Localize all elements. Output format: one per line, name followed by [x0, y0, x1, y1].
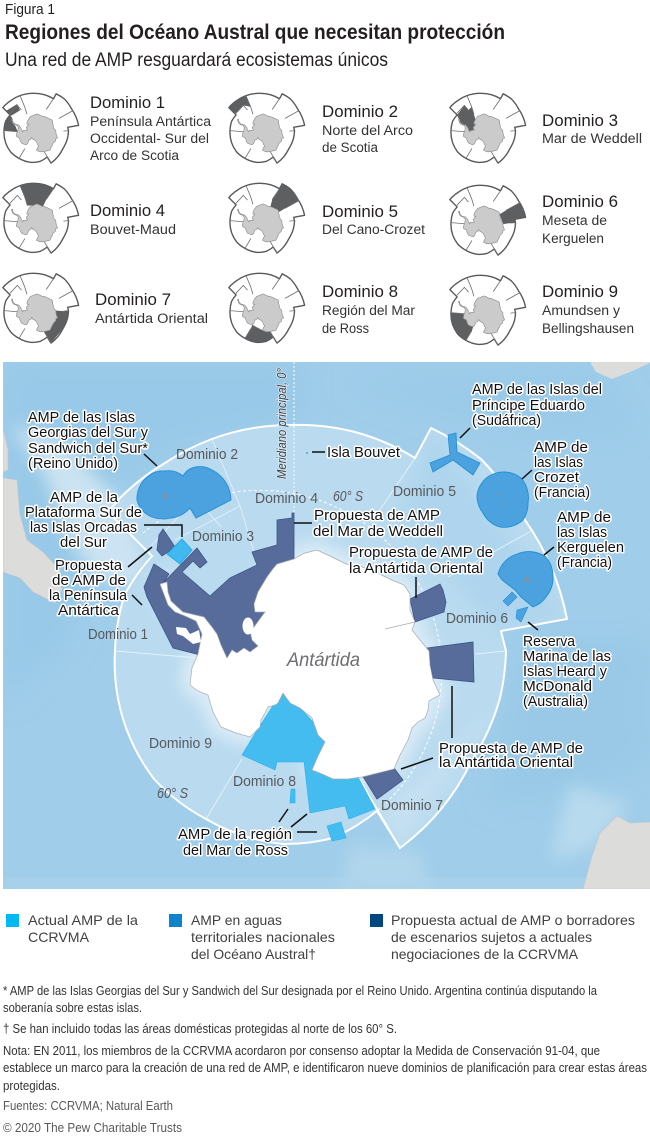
subtitle: Una red de AMP resguardará ecosistemas únicos [5, 50, 388, 71]
text: domain 6: Dominio 6 [542, 192, 618, 211]
legend: current CCAMLR MPA: CCRVMA [28, 929, 90, 945]
domain labels: Dominio 7 [381, 798, 443, 814]
text: domain 1 [90, 93, 212, 163]
legend: national waters MPA: territoriales nacionales [191, 929, 335, 945]
label: South Georgia MPA: Georgias del Sur y [28, 424, 148, 441]
label: prime meridian: Meridiano principal, 0° [275, 368, 289, 479]
label: Kerguelen MPA: AMP de [557, 509, 611, 526]
text: domain 8: de Ross [322, 321, 369, 336]
title: Regiones del Océano Austral que necesitan protección [5, 21, 505, 44]
legend: national waters MPA: AMP en aguas [191, 912, 282, 928]
label: Ross Sea MPA [178, 826, 292, 859]
text: domain 1: Dominio 1 [90, 93, 165, 112]
label: Ross Sea MPA: del Mar de Ross [183, 842, 288, 859]
label: Bouvet Island: Isla Bouvet [327, 444, 401, 461]
label: Weddell proposal: Propuesta de AMP [314, 507, 440, 524]
domain labels: 60° S [333, 489, 363, 505]
proposed MPA: South Orkney [157, 529, 175, 556]
copyright: © 2020 The Pew Charitable Trusts [3, 1121, 182, 1135]
label: Heard and McDonald reserve: Islas Heard y [523, 663, 607, 680]
sources: Fuentes: CCRVMA; Natural Earth [3, 1099, 173, 1113]
label: East Antarctica proposal lower: Propuesta de AMP de [439, 740, 583, 757]
label: Peninsula proposal: de AMP de [52, 572, 126, 589]
proposed MPA: Weddell and Antarctic Peninsula [144, 513, 294, 660]
label: East Antarctica proposal upper: la Antártida Oriental [349, 560, 483, 577]
text: domain 1: Arco de Scotia [90, 148, 179, 163]
domain labels: Dominio 4 [255, 491, 318, 507]
label: Heard and McDonald reserve: McDonald [523, 678, 592, 695]
icon: domain 9 locator [450, 275, 526, 345]
text: domain 6: Kerguelen [542, 231, 604, 246]
text: domain 3: Dominio 3 [542, 111, 618, 130]
label: Prince Edward MPA: Príncipe Eduardo [472, 397, 585, 414]
label: South Georgia MPA: Sandwich del Sur* [28, 440, 148, 457]
land: Australia [583, 816, 650, 889]
text: domain 5: Dominio 5 [322, 202, 398, 221]
text: domain 7 [95, 290, 208, 326]
domain labels: Dominio 2 [176, 447, 238, 463]
footnotes: * AMP de las Islas Georgias del Sur y Sandwich del Sur designada por el Reino Unido. Argentina continúa disputando la [3, 984, 597, 998]
label: Weddell proposal [313, 507, 443, 540]
footnotes: soberanía sobre estas islas. [3, 1001, 142, 1015]
icon: domain 1 locator [3, 93, 79, 163]
land: Africa [590, 362, 650, 379]
label: East Antarctica proposal lower: la Antártida Oriental [439, 754, 573, 771]
label: South Orkney MPA: las Islas Orcadas [30, 519, 137, 536]
ocean background [3, 362, 650, 889]
domain labels: Dominio 6 [446, 611, 508, 627]
domain labels: Dominio 1 [88, 627, 148, 643]
footnotes: protegidas. [3, 1079, 60, 1093]
leader lines [128, 428, 554, 832]
text: domain 1: Occidental- Sur del [90, 131, 209, 146]
legend: proposed MPA: Propuesta actual de AMP o borradores [391, 912, 635, 928]
label: Heard and McDonald reserve: Reserva [523, 633, 576, 650]
label: East Antarctica proposal upper: Propuesta de AMP de [349, 544, 493, 561]
current CCAMLR MPA: South Orkney shelf [167, 539, 192, 564]
label: Weddell proposal: del Mar de Weddell [313, 523, 443, 540]
label: Heard and McDonald reserve: Marina de las [523, 648, 611, 665]
label: Crozet MPA: (Francia) [534, 484, 590, 501]
national MPA: South Georgia and South Sandwich [137, 467, 231, 519]
label: Prince Edward MPA: (Sudáfrica) [472, 412, 541, 429]
domain labels: Dominio 8 [233, 774, 296, 790]
national MPA: Crozet [477, 472, 528, 527]
text: domain 6: Meseta de [542, 213, 607, 228]
label: Crozet MPA [534, 439, 590, 501]
text: domain 2 [322, 102, 413, 155]
domain labels: 60° S [157, 786, 188, 802]
label: Kerguelen MPA: las Islas [557, 524, 607, 541]
map panel [3, 362, 650, 889]
text: domain 8: Dominio 8 [322, 282, 398, 301]
national MPA: Kerguelen [498, 552, 553, 607]
text: domain 4: Dominio 4 [90, 201, 165, 220]
label: Peninsula proposal: Propuesta [55, 557, 123, 574]
label: Heard and McDonald reserve [523, 633, 611, 710]
current CCAMLR MPA: Ross Sea [242, 690, 375, 841]
text: domain 7: Dominio 7 [95, 290, 171, 309]
legend: national waters MPA: del Océano Austral† [191, 946, 316, 962]
text: domain 5 [322, 202, 425, 237]
label: East Antarctica proposal lower [439, 740, 583, 771]
continent: Antarctica [160, 550, 440, 779]
text: domain 4 [90, 201, 176, 237]
label: Ross Sea MPA: AMP de la región [178, 826, 292, 843]
label: South Georgia MPA [28, 409, 148, 472]
text: domain 2: de Scotia [322, 140, 378, 155]
figure label: Figura 1 [5, 1, 55, 18]
text: domain 9: Dominio 9 [542, 282, 618, 301]
text: domain 4: Bouvet-Maud [90, 222, 176, 237]
text: domain 2: Norte del Arco [322, 123, 413, 138]
label: Prince Edward MPA [472, 381, 602, 429]
label: Prince Edward MPA: AMP de las Islas del [472, 381, 602, 398]
label: Crozet MPA: las Islas [534, 454, 583, 471]
proposed MPA: East Antarctica west [410, 584, 446, 622]
label: Peninsula proposal: la Península [49, 587, 128, 604]
text: domain 8 [322, 282, 416, 336]
legend: national waters MPA [169, 912, 335, 962]
proposed MPA: East Antarctica east [362, 768, 403, 799]
label: Kerguelen MPA: Kerguelen [557, 539, 624, 556]
icon: domain 6 locator [450, 185, 526, 255]
label: Heard and McDonald reserve: (Australia) [523, 693, 588, 710]
icon: domain 2 locator [229, 93, 305, 163]
footnotes: † Se han incluido todas las áreas domésticas protegidas al norte de los 60° S. [3, 1022, 397, 1036]
text: domain 8: Región del Mar [322, 303, 416, 318]
proposed MPA: East Antarctica central [427, 642, 474, 682]
text: domain 7: Antártida Oriental [95, 311, 208, 326]
islands [161, 452, 530, 582]
domain labels: Dominio 5 [393, 484, 456, 500]
prime meridian [294, 362, 295, 512]
label: Kerguelen MPA [557, 509, 624, 571]
label: South Georgia MPA: AMP de las Islas [28, 409, 135, 426]
text: domain 2: Dominio 2 [322, 102, 398, 121]
domain labels: Dominio 9 [149, 736, 212, 752]
label: East Antarctica proposal upper [349, 544, 493, 577]
national MPA: Prince Edward Islands [430, 433, 480, 475]
domain labels: Dominio 3 [192, 529, 254, 545]
label: Kerguelen MPA: (Francia) [557, 554, 612, 571]
footnotes [3, 984, 647, 1093]
label: Peninsula proposal: Antártica [58, 602, 120, 619]
text: domain 5: Del Cano-Crozet [322, 222, 425, 237]
label: South Orkney MPA: Plataforma Sur de [25, 504, 142, 521]
label: South Orkney MPA: AMP de la [50, 489, 119, 506]
label: Peninsula proposal [49, 557, 128, 619]
text: domain 9 [542, 282, 634, 336]
icon: domain 7 locator [3, 273, 79, 343]
footnotes: Nota: EN 2011, los miembros de la CCRVMA acordaron por consenso adoptar la Medida de Conservación 91-04, que [3, 1044, 600, 1058]
icon: domain 4 locator [3, 183, 79, 253]
text: domain 9: Bellingshausen [542, 321, 634, 336]
label: South Georgia MPA: (Reino Unido) [28, 455, 118, 472]
legend: current CCAMLR MPA: Actual AMP de la [28, 912, 138, 928]
text: domain 1: Península Antártica [90, 114, 212, 129]
label: South Orkney MPA [25, 489, 142, 551]
domain labels [88, 447, 508, 814]
text: domain 3: Mar de Weddell [542, 131, 642, 146]
text: domain 3 [542, 111, 642, 146]
label: Antartida: Antártida [286, 650, 360, 671]
legend: proposed MPA [370, 912, 635, 962]
text: domain 6 [542, 192, 618, 246]
land: South America [3, 428, 62, 603]
legend: proposed MPA: negociaciones de la CCRVMA [391, 946, 579, 962]
icon: domain 3 locator [450, 93, 526, 163]
text: domain 9: Amundsen y [542, 303, 620, 318]
label: Crozet MPA: Crozet [534, 469, 580, 486]
national MPA: Heard and McDonald [503, 592, 528, 622]
label: Crozet MPA: AMP de [534, 439, 588, 456]
legend: current CCAMLR MPA [6, 912, 138, 945]
icon: domain 8 locator [229, 273, 305, 343]
icon: domain 5 locator [229, 183, 305, 253]
legend: proposed MPA: de escenarios sujetos a actuales [391, 929, 592, 945]
domain planning area [108, 425, 567, 848]
label: South Orkney MPA: del Sur [60, 534, 107, 551]
